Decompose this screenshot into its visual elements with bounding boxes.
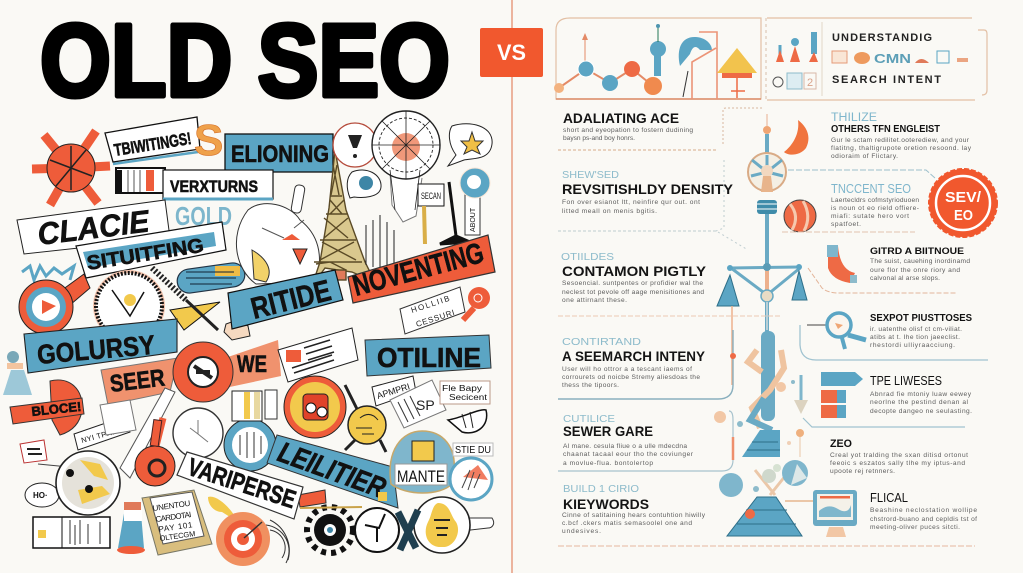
text block: CONTAMON PIGTLY: OTIILDES bbox=[561, 251, 614, 263]
text block: REVSITISHLDY DENSITY bbox=[562, 169, 734, 215]
icon: blue swirl bbox=[460, 168, 490, 198]
text block: OTHERS TFN ENGLEIST bbox=[831, 112, 972, 160]
badge: SEV/EO bbox=[929, 169, 997, 237]
text block: A SEEMARCH INTENY: A SEEMARCH INTENY bbox=[562, 348, 706, 364]
icon: right balance pan bbox=[792, 264, 807, 300]
note: APMPRI: APMPRI bbox=[376, 381, 411, 401]
banner: STBIWITINGS bbox=[105, 117, 200, 164]
icon: bullseye with feather bbox=[208, 497, 270, 566]
notebook: UNENTOU bbox=[142, 490, 212, 555]
banner: WE bbox=[225, 340, 281, 388]
sticker: hexagon bbox=[224, 320, 250, 340]
line: dashed connector bbox=[788, 170, 935, 178]
cloud note bbox=[74, 416, 130, 450]
banner: OTILINE bbox=[365, 335, 491, 376]
text block: A SEEMARCH INTENY: corrourets od noicbe Stremy aliesdoas the bbox=[562, 374, 700, 381]
title: OLD SEO bbox=[40, 3, 450, 118]
panel: search intent top illustration bbox=[554, 18, 987, 100]
banner: OTILINE: OTILINE bbox=[377, 342, 481, 373]
icon: yellow bulb gear bbox=[414, 497, 494, 553]
icon: left balance pan bbox=[717, 265, 739, 385]
text block: SEWER GARE: CUTILICE bbox=[563, 413, 615, 425]
banner: GOLURSY: GOLURSY bbox=[36, 330, 156, 370]
label: Fle Bapy Secicent bbox=[440, 381, 490, 404]
banner: SITUITFING: SITUITFING bbox=[85, 235, 205, 275]
icons: small grid bbox=[773, 73, 816, 89]
icon: alarm clock bbox=[355, 492, 418, 552]
text block: A SEEMARCH INTENY: CONTIRTAND bbox=[562, 336, 641, 348]
column and balance beam bbox=[731, 214, 800, 400]
panel: right column text blocks bbox=[776, 112, 997, 537]
icons: small grid: 2 bbox=[807, 77, 813, 89]
icon: base pyramid bbox=[727, 497, 802, 536]
icon: orange S: S bbox=[194, 116, 223, 165]
VS badge bbox=[480, 28, 543, 77]
text block: KIEYWORDS bbox=[562, 483, 706, 535]
icon: bubble with stripes bbox=[448, 410, 487, 433]
text block: SEWER GARE: a movlue-flua. bontolertop bbox=[563, 460, 653, 467]
text block: KIEYWORDS: c.bcf .ckers matis semasoolel one and bbox=[562, 520, 692, 527]
text block: OTHERS TFN ENGLEIST: Gur le sctam redilitet.ooterediew, and your bbox=[831, 137, 970, 144]
text block: CONTAMON PIGTLY: Sesoencial. suntpentes or profidier wal the bbox=[562, 280, 703, 287]
icon: flower bubble bbox=[347, 170, 381, 198]
cloud note: NYI TPRIO bbox=[80, 426, 121, 445]
icon: pie circle and pin bbox=[782, 429, 808, 486]
text block: TPE LIWESES: neorlne the pestind denan al bbox=[870, 399, 969, 406]
badge: MANTE: MANTE bbox=[397, 467, 445, 486]
icon row: CMN bbox=[832, 51, 968, 66]
text block: GITRD A BIITNOUE: calvonal al arse slops. bbox=[870, 275, 940, 282]
text block: FLICAL: Beashine neclostation wollipe bbox=[870, 507, 977, 514]
text block: REVSITISHLDY DENSITY: Fon over esianot ltt, neinfire qur out. ont bbox=[562, 199, 700, 206]
text block: KIEYWORDS: KIEYWORDS bbox=[563, 496, 649, 512]
illustration: growth chart and tools bbox=[554, 18, 761, 99]
text block: ZEO: Creal yot tralding the sxan ditisd ortonut bbox=[830, 452, 968, 459]
icon: middle pyramid stand bbox=[742, 430, 780, 457]
VS badge: VS bbox=[497, 40, 526, 65]
icon row: CMN: CMN bbox=[874, 51, 911, 66]
text block: GITRD A BIITNOUE bbox=[870, 246, 970, 282]
icon: monitor bbox=[785, 490, 857, 537]
label: Fle Bapy Secicent: Fle Bapy bbox=[442, 384, 482, 393]
badge: SEV/EO: SEV/ bbox=[945, 189, 982, 206]
text block: TPE LIWESES: decopte dangeo ne seulasting. bbox=[870, 408, 972, 415]
text block: CONTAMON PIGTLY: CONTAMON PIGTLY bbox=[562, 263, 707, 279]
icon: pin on top of lightbulb bbox=[763, 114, 771, 154]
icon: star speech bubble bbox=[448, 124, 492, 166]
text block: KIEYWORDS: BUILD 1 CIRIO bbox=[563, 483, 639, 495]
icon: pin with drop bbox=[776, 375, 808, 414]
card: HOLLIIB bbox=[400, 287, 465, 334]
banner: RITIDE: RITIDE bbox=[248, 274, 334, 326]
icon: label tag bbox=[465, 195, 480, 235]
panel: old SEO sticker collage bbox=[3, 111, 495, 566]
icon: lightbulb bbox=[748, 153, 786, 214]
text block: SEXPOT PIUSTTOSES: atibs at t. Ihe tion jaeeclist. bbox=[870, 334, 960, 341]
bubble: HO bbox=[25, 483, 59, 507]
text block: TNCCENT SEO: Laertecldrs cofmstyrioduoen bbox=[831, 197, 919, 204]
notebook: UNENTOU: UNENTOU bbox=[152, 499, 191, 513]
text block: REVSITISHLDY DENSITY: REVSITISHLDY DENSITY bbox=[562, 181, 734, 197]
lamp: pale blue bbox=[3, 351, 32, 395]
icon: spoked wheel bbox=[372, 111, 440, 222]
text block: CONTAMON PIGTLY: one attirnant these. bbox=[562, 297, 627, 304]
icon: stopwatch bbox=[173, 408, 223, 458]
text block: REVSITISHLDY DENSITY: SHEW'SED bbox=[562, 169, 619, 181]
text block: ZEO: feeoic s eszatos sally tlhe my iptus-and bbox=[830, 460, 965, 467]
text block: SEWER GARE bbox=[563, 413, 694, 467]
banner: SEER: SEER bbox=[108, 364, 166, 398]
text: GOLD: GOLD bbox=[175, 201, 232, 231]
text block: FLICAL: FLICAL bbox=[870, 491, 908, 505]
icon: fan circle bbox=[450, 458, 492, 500]
label: Fle Bapy Secicent: Secicent bbox=[449, 393, 488, 402]
card: SP striped bbox=[390, 380, 446, 428]
icon: doodle card bbox=[20, 440, 47, 463]
icon: red sunburst bbox=[32, 131, 110, 205]
text block: SEXPOT PIUSTTOSES: SEXPOT PIUSTTOSES bbox=[870, 313, 972, 324]
text block: FLICAL: meeting-oliver puces sitcti. bbox=[870, 524, 960, 531]
banner: LEILITIER: LEILITIER bbox=[274, 437, 390, 505]
heading: UNDERSTANDIG: UNDERSTANDIG bbox=[832, 32, 932, 44]
banner: VARIPERSE: VARIPERSE bbox=[184, 453, 299, 514]
heading: SEARCH INTENT: SEARCH INTENT bbox=[832, 74, 941, 86]
text block: CONTAMON PIGTLY bbox=[561, 251, 707, 304]
text block: TNCCENT SEO: TNCCENT SEO bbox=[831, 181, 911, 196]
card: bar chart bbox=[232, 390, 277, 421]
icons: arrow tab and red boxes bbox=[821, 372, 863, 418]
notebook: UNENTOU: CARDOTAI bbox=[155, 510, 192, 524]
card: bottom scribble bbox=[33, 517, 110, 548]
text block: TNCCENT SEO: miafi: sutate hero vort bbox=[831, 213, 909, 220]
text block: SEXPOT PIUSTTOSES: rhestordi ulliyraacciung. bbox=[870, 342, 955, 349]
text block: ZEO: upoote rej retnners. bbox=[830, 468, 895, 475]
line: left dotted connector bbox=[716, 160, 748, 250]
line: dotted connector bbox=[808, 268, 956, 293]
text block: TNCCENT SEO: spatfoet. bbox=[831, 221, 861, 228]
line: blue divider bbox=[803, 418, 965, 427]
icon: pencil and star bbox=[152, 268, 220, 330]
figure: climbing person bbox=[748, 331, 784, 430]
panel: understanding search intent bbox=[766, 18, 987, 100]
icon: orange flame bbox=[784, 120, 808, 155]
text block: A SEEMARCH INTENY: thess the tipoors. bbox=[562, 382, 619, 389]
icon: capsule bbox=[176, 261, 246, 295]
banner: BLOCE bbox=[10, 380, 84, 435]
banner: small bbox=[298, 490, 362, 508]
banner: STBIWITINGS: TBIWITINGS! bbox=[113, 129, 193, 160]
text block: OTHERS TFN ENGLEIST: THILIZE bbox=[831, 112, 877, 124]
panel: left column text blocks bbox=[558, 110, 975, 546]
banner: BLOCE: BLOCE! bbox=[31, 399, 82, 419]
icon: magnifier bbox=[807, 313, 866, 349]
line: lower bracket bbox=[558, 411, 733, 471]
note: APMPRI bbox=[372, 376, 416, 406]
text block: ZEO bbox=[830, 438, 968, 475]
icon: yellow puzzle circle bbox=[38, 451, 120, 515]
panel: central lightbulb and balance illustration bbox=[558, 108, 807, 536]
icon: fork bbox=[366, 215, 394, 267]
text block: SEXPOT PIUSTTOSES bbox=[870, 313, 972, 349]
sign: SECAN bbox=[418, 184, 444, 244]
icon: white pencil bbox=[120, 388, 175, 478]
icon: red magnifier bbox=[463, 287, 490, 320]
icon: blue striped ring bbox=[224, 419, 276, 471]
card: newspaper bbox=[278, 328, 358, 382]
text block: SEWER GARE: chaanat tacaal eour tho the coviunger bbox=[563, 451, 694, 458]
text block: KIEYWORDS: undesives. bbox=[562, 528, 601, 535]
icon: red ring bbox=[173, 342, 233, 402]
icon: black gear bbox=[307, 507, 353, 553]
icon: label tag: ABOUT bbox=[470, 207, 477, 232]
label: STIE DU: STIE DU bbox=[455, 445, 491, 456]
badge: MANTE bbox=[390, 431, 454, 493]
decorative circles bbox=[714, 411, 790, 497]
text block: GITRD A BIITNOUE: GITRD A BIITNOUE bbox=[870, 246, 964, 257]
card: SP striped: SP bbox=[416, 397, 435, 413]
icon: striped ball bbox=[784, 200, 816, 232]
dividers bbox=[558, 150, 975, 546]
text block: FLICAL: chstrord-buano and cepldis tst of bbox=[870, 516, 977, 523]
icons: pins bbox=[776, 32, 818, 62]
banner: ELIONING bbox=[225, 134, 333, 172]
bubble: HO: HO· bbox=[33, 491, 48, 500]
text block: OTHERS TFN ENGLEIST: odioraim of Flictary. bbox=[831, 153, 898, 160]
text block: TPE LIWESES: TPE LIWESES bbox=[870, 374, 942, 388]
banner: VERXTURNS: VERXTURNS bbox=[170, 177, 258, 196]
icon: compass dial bbox=[93, 270, 165, 342]
line: left dashed connector top bbox=[723, 108, 763, 144]
text block: ADALIATING ACE: short and eyeopation to fostern dudining bbox=[563, 127, 693, 134]
text block: TNCCENT SEO: is noun ot eo rield offiere- bbox=[831, 205, 919, 212]
text block: SEWER GARE: SEWER GARE bbox=[563, 423, 653, 439]
banner: WE: WE bbox=[237, 351, 267, 378]
text block: ZEO: ZEO bbox=[830, 438, 852, 450]
striped box bbox=[116, 168, 165, 193]
icon: question ring bbox=[333, 123, 377, 167]
text block: SEWER GARE: Al mane. cesula fliue o a ulle mdecdna bbox=[563, 443, 687, 450]
text block: GITRD A BIITNOUE: The suist, cauehing inordinamd bbox=[870, 258, 970, 265]
banner: NOVENTING: NOVENTING bbox=[350, 237, 487, 303]
text block: TPE LIWESES: Abnrad fie mtoniy luaw eewey bbox=[870, 391, 972, 398]
text block: KIEYWORDS: Cinne of satitaining hears contuhtion hiwilly bbox=[562, 512, 706, 519]
illustration: Eiffel tower bbox=[312, 150, 375, 286]
line: left stem with dot bbox=[558, 330, 736, 399]
icon: red lens bbox=[135, 420, 175, 486]
line: dashed divider bbox=[782, 231, 915, 233]
notebook: UNENTOU: PAY 101 bbox=[158, 520, 193, 534]
card: HOLLIIB: CESSURI bbox=[415, 308, 456, 329]
icon: traffic cone bbox=[117, 502, 145, 554]
center divider bbox=[511, 0, 513, 573]
text block: GITRD A BIITNOUE: oure flor the onre riory and bbox=[870, 267, 960, 274]
text block: TNCCENT SEO bbox=[831, 181, 919, 228]
text block: A SEEMARCH INTENY: User will ho ottror a a tescant iaems of bbox=[562, 366, 692, 373]
text block: REVSITISHLDY DENSITY: litted meall on menis bgitis. bbox=[562, 208, 657, 215]
icon: black brush bbox=[440, 182, 470, 244]
text block: TPE LIWESES bbox=[870, 374, 972, 415]
banner: SEER bbox=[101, 358, 178, 405]
banner: CLACIE: CLACIE bbox=[36, 203, 152, 252]
icon: orange hand bbox=[827, 245, 857, 283]
notebook: UNENTOU: OLTECGM bbox=[159, 529, 196, 543]
icon: scribble bbox=[22, 266, 74, 280]
text block: ADALIATING ACE: baysn ps-and boy honrs. bbox=[563, 135, 635, 142]
icon: yellow circle face bbox=[284, 376, 346, 438]
banner: GOLURSY bbox=[24, 319, 177, 373]
text block: A SEEMARCH INTENY bbox=[562, 336, 706, 389]
banner: ELIONING: ELIONING bbox=[231, 141, 329, 168]
note: striped paper bbox=[100, 400, 136, 435]
illustration: white cat bbox=[236, 184, 319, 284]
text block: FLICAL bbox=[870, 491, 977, 531]
icon: target with flag bbox=[19, 274, 90, 334]
icon: yellow face character bbox=[345, 385, 386, 452]
card: HOLLIIB: HOLLIIB bbox=[410, 294, 451, 315]
sign: SECAN: SECAN bbox=[421, 191, 441, 201]
banner: SITUITFING bbox=[76, 222, 226, 278]
text block: ADALIATING ACE: ADALIATING ACE bbox=[563, 110, 679, 126]
banner: VERXTURNS bbox=[163, 170, 273, 199]
text block: OTHERS TFN ENGLEIST: OTHERS TFN ENGLEIST bbox=[831, 124, 940, 135]
text block: CONTAMON PIGTLY: neclest tot pevole off aage menisitiones and bbox=[562, 289, 704, 296]
badge: SEV/EO: EO bbox=[954, 207, 973, 224]
text block: ADALIATING ACE bbox=[563, 110, 693, 142]
text block: SEXPOT PIUSTTOSES: ir. uatenthe olisf ct cm-viliat. bbox=[870, 326, 962, 333]
line: blue curved divider bbox=[800, 325, 988, 360]
icon: concentric arcs bbox=[266, 520, 289, 563]
text block: OTHERS TFN ENGLEIST: flatitng, thaltigrupote oretion resoond. lay bbox=[831, 145, 972, 152]
